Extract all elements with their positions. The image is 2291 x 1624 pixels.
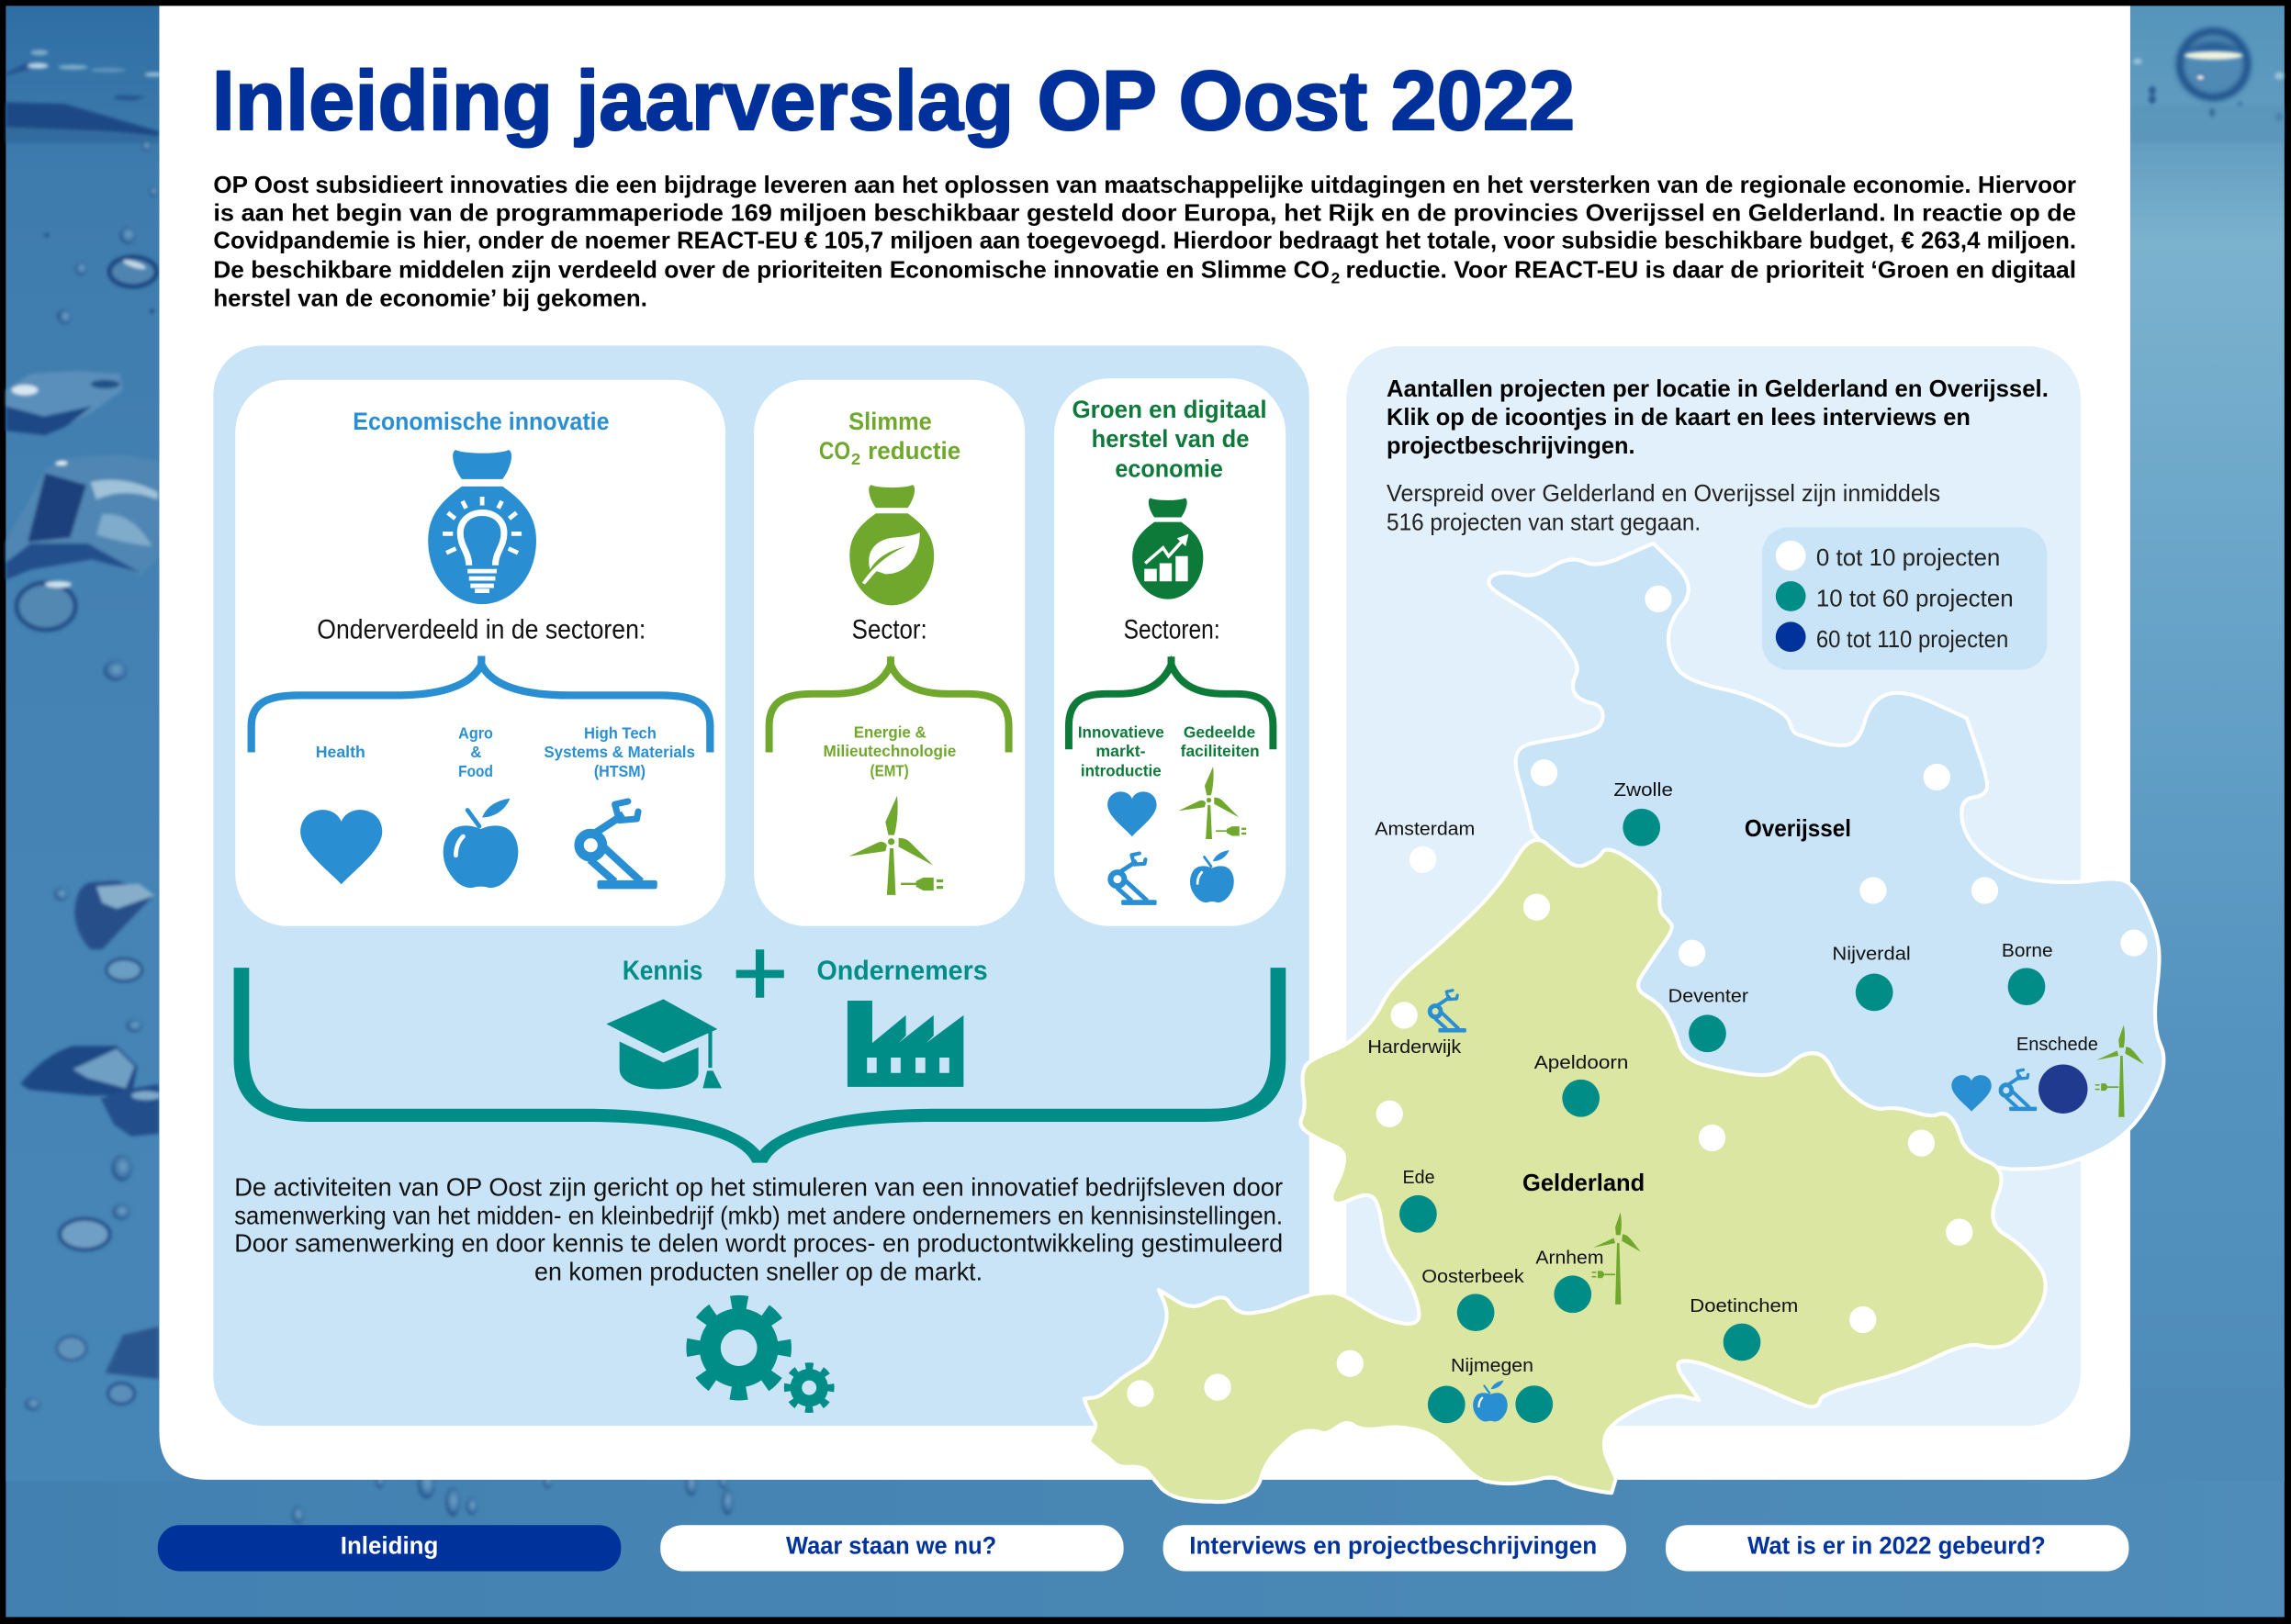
map label: Gelderland: Gelderland [1522, 1170, 1645, 1196]
icon: money bag with light bulb [428, 450, 536, 604]
button: Wat is er in 2022 gebeurd [1666, 1525, 2128, 1571]
icon: heart [1107, 791, 1157, 836]
sector label: EMT: (EMT) [870, 762, 909, 780]
map labels: Harderwijk [1367, 1036, 1462, 1058]
sector label: EMT: Energie & [854, 723, 927, 742]
icon: graduation cap [606, 999, 722, 1089]
map: Gelderland [1084, 840, 2046, 1502]
icon: robot arm [1110, 854, 1157, 905]
legend [1762, 527, 2047, 670]
intro text block [213, 173, 2076, 311]
intro text block: Covidpandemie is hier, onder de noemer REACT-EU € 105,7 miljoen aan toegevoegd. Hierdoor bedraagt het totale, voor subsidie beschikbare budget, € 263,4 miljoen. [213, 229, 2076, 254]
text: Sectoren: Sectoren: [1124, 614, 1220, 644]
map icon: turbine Enschede [2095, 1025, 2144, 1117]
text: activiteiten: De activiteiten van OP Oost zijn gericht op het stimuleren van een innovatief bedrijfsleven door [234, 1172, 1283, 1201]
sector labels: introductie [1081, 762, 1162, 780]
map labels: Nijverdal [1832, 943, 1911, 964]
panel: left priorities [213, 345, 1309, 1426]
intro text block: OP Oost subsidieert innovaties die een bijdrage leveren aan het oplossen van maatschappelijke uitdagingen en het versterken van de regionale economie. Hiervoor [213, 173, 2076, 198]
icon: wind turbine [848, 796, 943, 895]
map icon: robot Enschede [2001, 1070, 2037, 1111]
text: Verspreid [1387, 481, 1940, 536]
sector labels: Systems & Materials [544, 743, 695, 761]
sector labels: markt- [1095, 742, 1146, 760]
icon: factory [848, 1001, 963, 1087]
map labels: Deventer [1668, 986, 1748, 1007]
icon: wind turbine [1178, 767, 1246, 839]
brace: blue [252, 655, 710, 752]
button: Inleiding: Inleiding [341, 1531, 438, 1559]
card: Economische innovatie [235, 380, 725, 926]
map labels: Zwolle [1613, 779, 1673, 801]
card: Groen en digitaal herstel [1054, 378, 1286, 926]
sector labels: Health [316, 743, 365, 761]
map labels: Oosterbeek [1421, 1266, 1524, 1287]
sector label: EMT [823, 723, 957, 780]
icon: apple [444, 799, 518, 888]
sector labels: Food [458, 762, 493, 780]
map labels: Enschede [2016, 1034, 2098, 1055]
heading: Groen en digitaal herstel van de economie: herstel van de [1092, 425, 1249, 453]
intro text block: 2 [1331, 270, 1340, 287]
map marker: Enschede 60 tot 110 projecten [2038, 1064, 2088, 1114]
button: Waar staan we nu: Waar staan we nu? [786, 1531, 996, 1559]
heading: Slimme CO2 reductie: 2 [851, 450, 860, 468]
text: Sector: Sector: [852, 614, 927, 644]
brace: dark green [1069, 656, 1273, 749]
heading: Slimme CO2 reductie: reductie [868, 437, 960, 465]
heading: Aantallen projecten: projectbeschrijvingen. [1387, 433, 1635, 459]
button: Inleiding [158, 1525, 621, 1571]
intro text block: is aan het begin van de programmaperiode 169 miljoen beschikbaar gesteld door Europa, het Rijk en de provincies Overijssel en Gelderland. In reactie op de [213, 200, 2076, 226]
sector labels: High Tech [584, 723, 657, 742]
text: Verspreid: Verspreid over Gelderland en Overijssel zijn inmiddels [1387, 481, 1940, 507]
heading: Aantallen projecten: Klik op de icoontjes in de kaart en lees interviews en [1387, 405, 1971, 431]
legend: 60 tot 110 projecten [1816, 627, 2008, 653]
legend: 0 tot 10 projecten [1816, 545, 2000, 571]
sector labels: Agro [458, 723, 493, 742]
button: Interviews en projectbeschrijvingen: Interviews en projectbeschrijvingen [1189, 1531, 1597, 1559]
map markers: 0 tot 10 projecten [1127, 586, 2148, 1407]
heading: Groen en digitaal herstel van de economie: Groen en digitaal [1072, 396, 1267, 423]
button: Waar staan we nu [660, 1525, 1124, 1571]
text: Onderverdeeld in de sectoren: Onderverdeeld in de sectoren: [317, 614, 646, 644]
heading: Economische innovatie: Economische innovatie [353, 408, 610, 435]
text: activiteiten: en komen producten sneller op de markt. [534, 1258, 983, 1286]
legend: 10 tot 60 projecten [1816, 586, 2014, 611]
map icon: turbine Arnhem [1592, 1213, 1641, 1305]
sector labels [316, 723, 695, 780]
heading: Slimme CO2 reductie [819, 408, 960, 468]
heading: Slimme CO2 reductie: CO [819, 437, 850, 465]
text: activiteiten: Door samenwerking en door kennis te delen wordt proces- en productontwikkeling gestimuleerd [234, 1229, 1283, 1258]
icon: gears [693, 1303, 831, 1409]
heading: Ondernemers: Ondernemers [816, 956, 988, 986]
sector labels [1078, 723, 1260, 780]
sector labels: faciliteiten [1181, 742, 1260, 760]
sector labels: & [470, 743, 482, 761]
map labels: Nijmegen [1451, 1355, 1533, 1376]
map labels: Arnhem [1535, 1247, 1603, 1268]
map labels: Amsterdam [1375, 819, 1475, 840]
sector label: EMT: Milieutechnologie [823, 742, 957, 760]
map icon: heart Enschede [1951, 1075, 1992, 1112]
heading: Groen en digitaal herstel van de economie [1072, 396, 1267, 483]
map labels [1367, 779, 2098, 1376]
sector labels: Gedeelde [1184, 723, 1255, 742]
button: Wat is er in 2022 gebeurd: Wat is er in 2022 gebeurd? [1747, 1531, 2046, 1559]
heading: Kennis: Kennis [623, 956, 702, 986]
heading: Aantallen projecten: Aantallen projecten per locatie in Gelderland en Overijssel. [1387, 376, 2049, 402]
map label: Overijssel: Overijssel [1745, 816, 1851, 842]
icon: robot arm [579, 801, 657, 889]
title: Inleiding jaarverslag OP Oost 2022 [212, 52, 1575, 148]
heading: Aantallen projecten [1387, 376, 2049, 459]
icon: heart [300, 810, 382, 884]
brace: teal [234, 968, 1286, 1163]
map labels: Ede [1403, 1167, 1435, 1188]
icon: apple [1190, 850, 1234, 902]
navigation: tabs [158, 1525, 2128, 1571]
heading: Groen en digitaal herstel van de economie: economie [1115, 455, 1223, 483]
card: Slimme CO2 reductie [754, 380, 1025, 926]
text: Verspreid: 516 projecten van start gegaan. [1387, 510, 1701, 536]
intro text block: reductie. Voor REACT-EU is daar de prioriteit ‘Groen en digitaal [1345, 257, 2076, 283]
button: Interviews en projectbeschrijvingen [1163, 1525, 1626, 1571]
text: activiteiten: samenwerking van het midden- en kleinbedrijf (mkb) met andere ondernemers en kennisinstellingen. [234, 1201, 1283, 1229]
icon: plus [736, 949, 784, 998]
map labels: Doetinchem [1690, 1295, 1798, 1316]
text: activiteiten [234, 1172, 1283, 1286]
icon: money bag with chart [1132, 498, 1203, 599]
map labels: Borne [2002, 940, 2053, 961]
map markers: 10 tot 60 projecten [1399, 809, 2045, 1423]
sector labels: (HTSM) [594, 762, 646, 780]
brace: green [769, 656, 1009, 752]
heading: Slimme CO2 reductie: Slimme [848, 408, 932, 435]
map: Overijssel [1488, 543, 2163, 1170]
panel: right map [1346, 346, 2081, 1426]
map icon: apple Nijmegen [1473, 1381, 1508, 1421]
intro text block: herstel van de economie’ bij gekomen. [213, 286, 647, 311]
white content panel [159, 6, 2130, 1480]
map labels: Apeldoorn [1534, 1052, 1628, 1073]
sector labels: Innovatieve [1078, 723, 1164, 742]
intro text block: De beschikbare middelen zijn verdeeld over de prioriteiten Economische innovatie en Slimme CO [213, 257, 1330, 283]
map icon: robot Harderwijk [1430, 991, 1466, 1033]
icon: money bag with leaf [849, 485, 934, 605]
